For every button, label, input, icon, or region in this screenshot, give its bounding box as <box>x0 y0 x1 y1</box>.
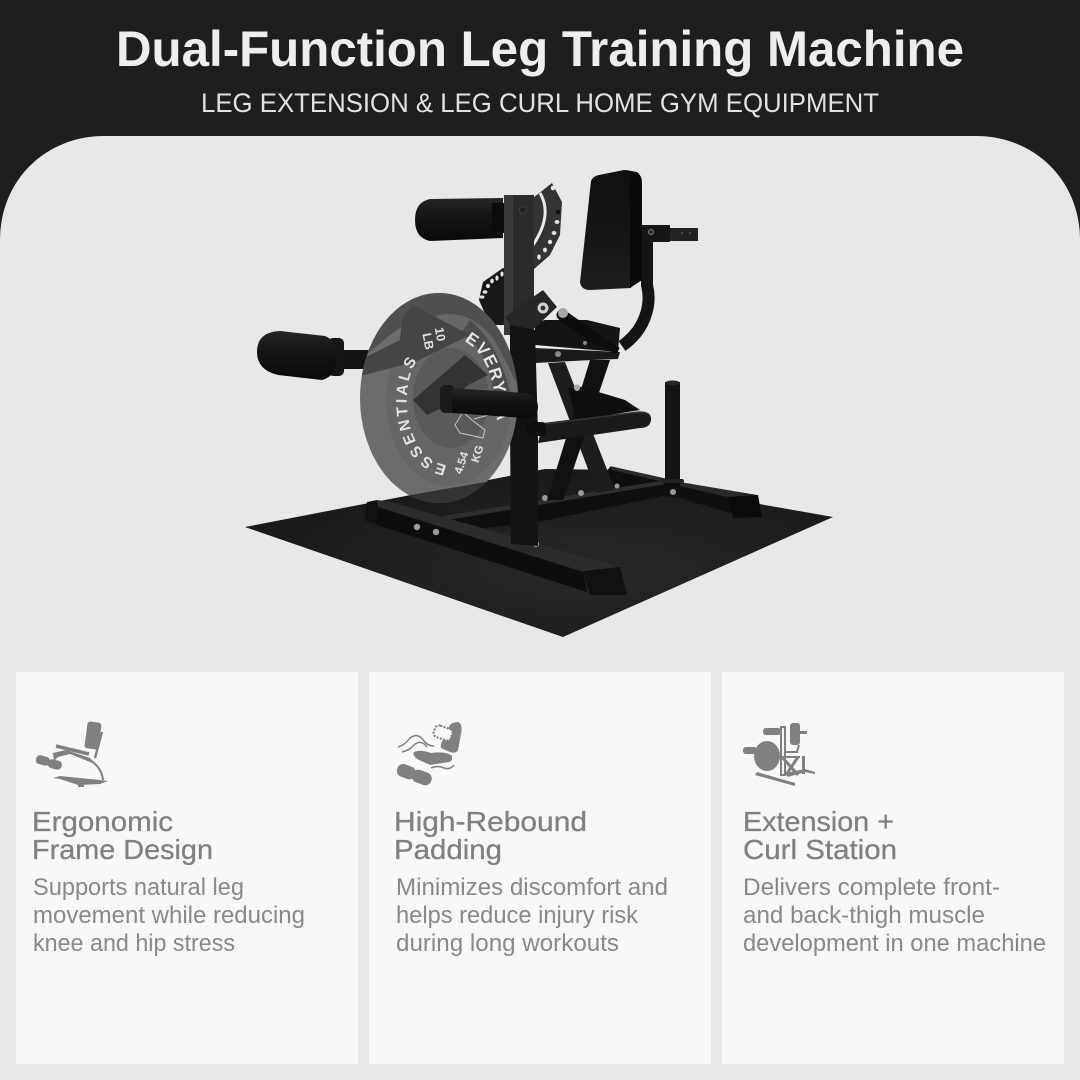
description: knee and hip stress <box>33 930 235 957</box>
description <box>743 874 1046 957</box>
lower adjustment disc <box>479 268 510 325</box>
plate darker top <box>368 293 518 384</box>
4.54 KG label <box>455 446 483 474</box>
title: Dual-Function Leg Training Machine <box>116 21 964 77</box>
rear base frame <box>443 380 762 530</box>
description: helps reduce injury risk <box>396 902 639 929</box>
crossbar <box>443 481 668 530</box>
left leg roller pad <box>257 331 375 380</box>
description <box>396 874 668 957</box>
description: during long workouts <box>396 930 619 957</box>
pivot bracket <box>505 290 557 342</box>
10 LB label: 10 <box>432 326 448 342</box>
floor mat <box>245 469 833 637</box>
X support frame <box>547 360 615 500</box>
ESSENTIALS lettering: ESSENTIALS <box>396 357 446 476</box>
rear foot <box>664 482 757 513</box>
heading line two: Curl Station <box>743 834 897 865</box>
subtitle: LEG EXTENSION & LEG CURL HOME GYM EQUIPMENT <box>201 88 879 118</box>
plate lower dark overlap <box>409 482 486 503</box>
base front beam <box>364 500 627 595</box>
description: development in one machine <box>743 930 1046 957</box>
product illustration: leg training machine <box>245 170 833 637</box>
4.54 KG label: KG <box>470 444 487 464</box>
middle post <box>510 325 538 432</box>
icon: machine <box>743 723 815 786</box>
description: Minimizes discomfort and <box>396 874 668 901</box>
description: Delivers complete front- <box>743 874 1000 901</box>
rear weight peg <box>665 382 680 482</box>
front post <box>510 428 538 546</box>
card: Ergonomic Frame Design <box>16 672 358 1064</box>
upper leg roller pad <box>415 198 506 241</box>
10 LB label <box>422 328 446 350</box>
plate inner band <box>435 314 504 359</box>
icon: ergonomic seat <box>35 721 108 787</box>
heading line two: Frame Design <box>32 834 213 865</box>
seat back support tube <box>622 225 649 346</box>
description: Supports natural leg <box>33 874 244 901</box>
card: High-Rebound Padding <box>369 672 711 1064</box>
seat pad and support <box>535 308 620 363</box>
upper post <box>504 195 534 335</box>
seen-through dark band <box>360 305 470 376</box>
10 LB label: LB <box>420 332 436 351</box>
heading: Extension + <box>743 806 894 837</box>
plate upper right band <box>462 320 510 392</box>
icon: rebound padding <box>395 722 462 787</box>
description: and back-thigh muscle <box>743 902 985 929</box>
weight plate <box>360 293 518 503</box>
plate outer ring <box>360 293 518 503</box>
heading line two: Padding <box>394 834 502 865</box>
front tube collar <box>526 422 546 436</box>
card: Extension + Curl Station <box>722 672 1064 1064</box>
hub <box>413 348 489 448</box>
plate logo <box>454 414 489 439</box>
front roller shaft <box>440 385 538 418</box>
4.54 KG label: 4.54 <box>453 450 471 476</box>
description: movement while reducing <box>33 902 305 929</box>
seat back pad <box>580 170 642 290</box>
description <box>33 874 305 957</box>
U-shaped foot guard <box>538 385 651 443</box>
heading: Ergonomic <box>32 806 173 837</box>
seen-through wedge <box>413 355 488 415</box>
back pad adjustment bar <box>643 225 698 242</box>
upper adjustment disc <box>533 183 562 270</box>
heading: High-Rebound <box>394 806 587 837</box>
